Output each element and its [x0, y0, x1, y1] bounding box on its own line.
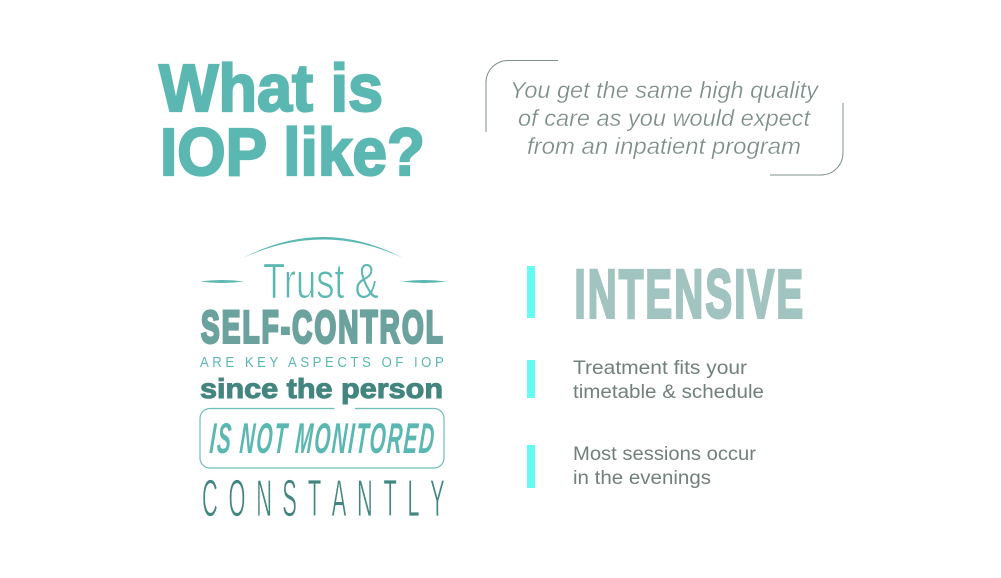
- INTENSIVE heading: INTENSIVE: [574, 255, 803, 332]
- evenings text: [573, 444, 757, 489]
- title: IOP like?: [160, 115, 425, 190]
- callout frame bottom right: [770, 103, 843, 175]
- intensive row: [527, 255, 803, 332]
- title: [159, 51, 425, 190]
- Trust &: Trust &: [263, 254, 379, 309]
- callout text: of care as you would expect: [518, 105, 812, 131]
- accent bar 1: [527, 266, 535, 318]
- ARE KEY ASPECTS OF IOP: ARE KEY ASPECTS OF IOP: [200, 353, 444, 370]
- accent bar 2: [527, 360, 535, 398]
- callout text: [510, 77, 820, 159]
- accent bar 3: [527, 445, 535, 488]
- evenings text: in the evenings: [573, 468, 711, 489]
- schedule text: timetable & schedule: [573, 382, 764, 403]
- right flourish: [402, 280, 446, 283]
- IS NOT MONITORED: IS NOT MONITORED: [208, 415, 436, 463]
- typographic lockup: trust and self-control: [200, 237, 446, 528]
- CONSTANTLY: CONSTANTLY: [202, 470, 445, 528]
- schedule text: [573, 358, 764, 403]
- evenings text: Most sessions occur: [573, 444, 757, 465]
- left flourish: [200, 280, 244, 283]
- title: What is: [159, 51, 383, 126]
- callout text: from an inpatient program: [527, 133, 801, 159]
- callout frame top left: [486, 60, 558, 132]
- since the person: since the person: [200, 373, 443, 404]
- schedule text: Treatment fits your: [573, 358, 748, 379]
- callout text: You get the same high quality: [510, 77, 820, 103]
- callout: inpatient quality quote: [486, 60, 843, 175]
- evenings point: [527, 444, 757, 489]
- rounded box outline: [200, 408, 444, 468]
- decorative arc: [243, 237, 403, 258]
- SELF-CONTROL: SELF-CONTROL: [201, 302, 443, 352]
- schedule point: [527, 358, 764, 403]
